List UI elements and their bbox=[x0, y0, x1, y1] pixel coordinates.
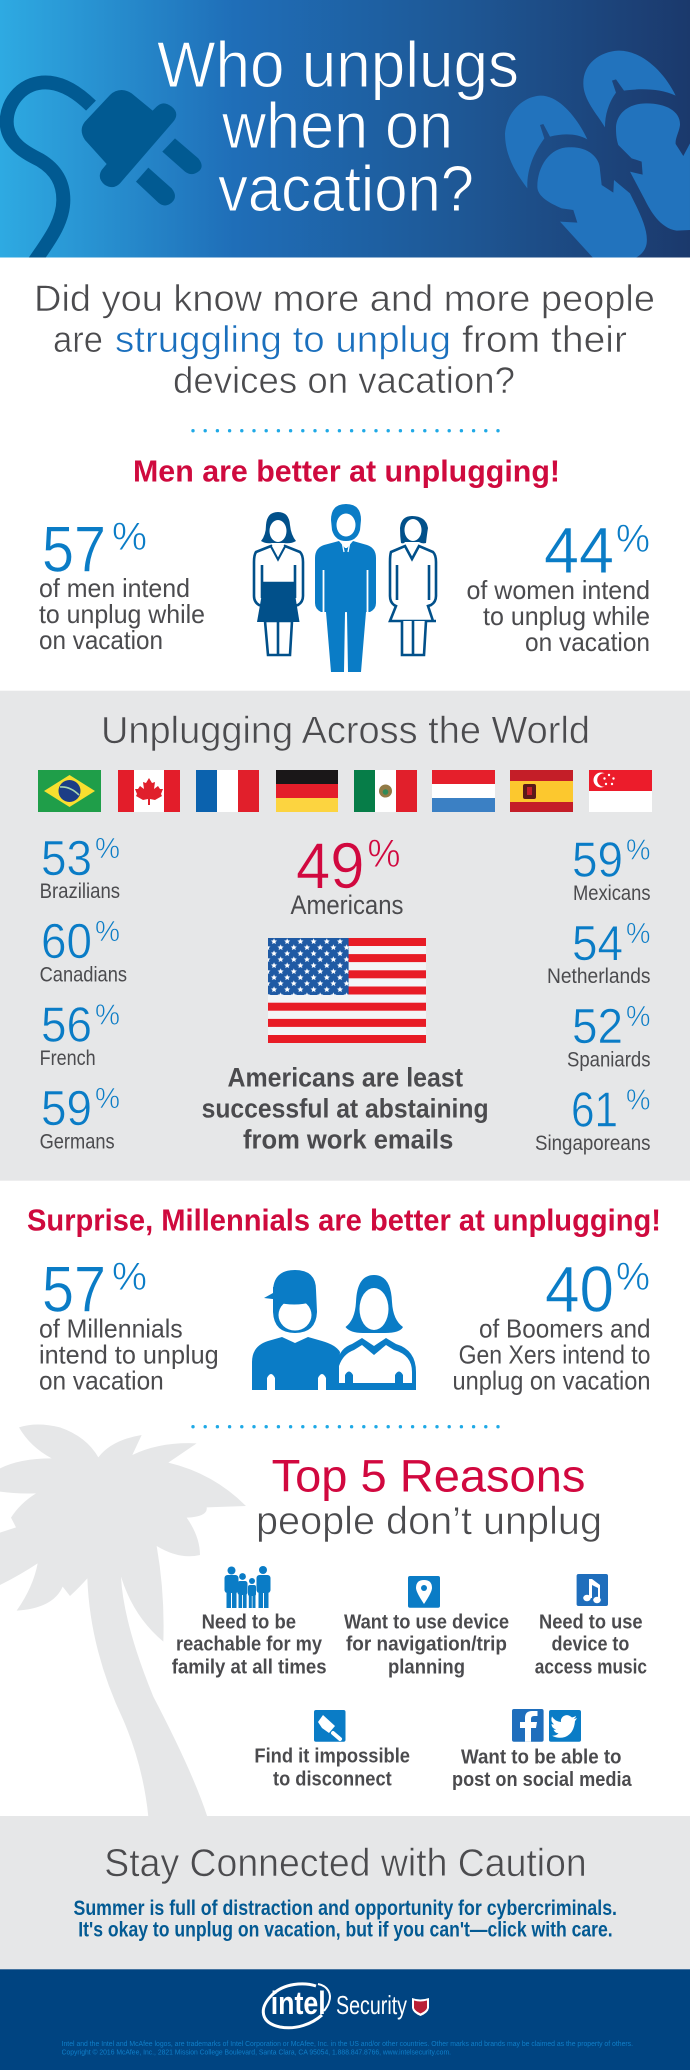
stat: 44 percent of women: % bbox=[616, 518, 650, 561]
text: impossible to disconnect: to disconnect bbox=[273, 1767, 392, 1790]
stat: Spaniards 52 percent: Spaniards bbox=[567, 1049, 650, 1072]
stat: Americans 49 percent: % bbox=[368, 833, 400, 876]
reason: impossible to disconnect bbox=[254, 1710, 410, 1790]
text block: Americans least successful: successful at abstaining bbox=[202, 1094, 489, 1124]
stat: Netherlands 54 percent: Netherlands bbox=[547, 965, 650, 988]
stat: Germans 59 percent: 59 bbox=[41, 1082, 92, 1136]
panel: header banner bbox=[0, 0, 690, 263]
stat: 40 percent of boomers and gen xers: % bbox=[616, 1256, 650, 1299]
stat: 57 percent of men: on vacation bbox=[39, 625, 163, 655]
text: reachable for family bbox=[172, 1610, 327, 1678]
text: social media bbox=[452, 1745, 632, 1791]
text: navigation: Want to use device bbox=[344, 1610, 509, 1633]
text block: Americans least successful: from work emails bbox=[243, 1124, 453, 1154]
stat: 44 percent of women: on vacation bbox=[525, 627, 650, 657]
stat: 57 percent of millennials: % bbox=[112, 1256, 147, 1299]
stat: French 56 percent: % bbox=[95, 1000, 120, 1032]
reason: social media bbox=[452, 1709, 632, 1791]
text: navigation bbox=[344, 1610, 509, 1678]
flag: Canada bbox=[118, 770, 180, 812]
stat: 44 percent of women: to unplug while bbox=[483, 601, 650, 631]
stat: 57 percent of men: to unplug while bbox=[39, 599, 205, 629]
stat: 44 percent of women bbox=[466, 514, 650, 657]
text block: intro question: devices on vacation? bbox=[173, 360, 515, 401]
flag: Netherlands bbox=[432, 770, 495, 812]
title: vacation? bbox=[218, 152, 474, 225]
stat: Canadians 60 percent: % bbox=[95, 916, 120, 948]
stat: Netherlands 54 percent: % bbox=[626, 918, 650, 950]
text block: legal copy: Copyright © 2016 McAfee, Inc., 2821 Mission College Boulevard, Santa Clara, CA 95054, 1.888.847.8766, www.intelsecurity.com. bbox=[62, 2048, 451, 2056]
flag: Mexico bbox=[354, 770, 417, 812]
text: reachable for family: family at all times bbox=[172, 1655, 327, 1678]
icon: twitter bbox=[549, 1710, 581, 1742]
stat: Singaporeans 61 percent: 61 bbox=[571, 1084, 618, 1138]
flag: Germany bbox=[276, 770, 338, 812]
reason: music bbox=[535, 1574, 647, 1678]
panel: men vs women bbox=[39, 454, 650, 672]
heading: across the world: Unplugging Across the World bbox=[101, 710, 590, 752]
stat: Singaporeans 61 percent: Singaporeans bbox=[535, 1132, 650, 1155]
panel: millennials vs boomers bbox=[27, 1203, 661, 1395]
title: when on bbox=[221, 89, 453, 162]
heading: stay connected: Stay Connected with Caution bbox=[104, 1842, 587, 1885]
stat: Germans 59 percent: Germans bbox=[40, 1130, 115, 1153]
text block: intro question: struggling to unplug bbox=[115, 319, 451, 360]
stat: French 56 percent: French bbox=[40, 1047, 96, 1070]
stat: French 56 percent: 56 bbox=[41, 999, 92, 1053]
stat: Spaniards 52 percent bbox=[567, 1000, 650, 1072]
title: Who unplugs bbox=[157, 28, 519, 101]
icon: music note bbox=[577, 1574, 608, 1606]
text: navigation: planning bbox=[388, 1655, 465, 1678]
icon: map pin bbox=[408, 1576, 440, 1608]
flag: Brazil bbox=[38, 770, 101, 812]
logo: Intel Security: intel bbox=[271, 1985, 326, 2021]
stat: 57 percent of men: of men intend bbox=[39, 573, 190, 603]
stat: Americans 49 percent: Americans bbox=[290, 890, 404, 920]
illustration: palm tree bbox=[0, 1424, 246, 1817]
panel: stay connected with caution bbox=[0, 1816, 690, 1970]
stat: 57 percent of men bbox=[39, 513, 205, 655]
text block: legal copy: Intel and the Intel and McAfee logos, are trademarks of Intel Corporation or McAfee, Inc. in the US and/or other countries. Other marks and brands may be claimed as the property of others. bbox=[62, 2041, 633, 2048]
stat: 40 percent of boomers and gen xers: unplug on vacation bbox=[452, 1365, 650, 1395]
reason: reachable for family bbox=[172, 1566, 327, 1678]
title bbox=[157, 28, 519, 225]
stat: Mexicans 59 percent: Mexicans bbox=[573, 882, 650, 905]
stat: 57 percent of men: 57 bbox=[42, 513, 106, 586]
panel: unplugging across the world bbox=[0, 691, 690, 1181]
stat: 57 percent of millennials: on vacation bbox=[39, 1365, 164, 1395]
flag: Singapore bbox=[589, 770, 652, 812]
stat: Mexicans 59 percent: 59 bbox=[572, 834, 623, 888]
stat: Netherlands 54 percent bbox=[547, 917, 650, 988]
icon: United States flag bbox=[268, 938, 426, 1043]
stat: Mexicans 59 percent: % bbox=[626, 835, 650, 867]
text block: intro question: from their bbox=[462, 319, 627, 360]
icon: family bbox=[224, 1566, 270, 1608]
text: reachable for family: reachable for my bbox=[176, 1633, 323, 1656]
stat: 57 percent of millennials: intend to unplug bbox=[39, 1339, 219, 1369]
text block: Americans least successful bbox=[202, 1063, 489, 1154]
stat: 57 percent of millennials: 57 bbox=[42, 1253, 106, 1326]
flag: Spain bbox=[510, 770, 573, 812]
stat: Brazilians 53 percent bbox=[40, 832, 120, 903]
stat: 57 percent of millennials bbox=[39, 1253, 219, 1395]
text: impossible to disconnect bbox=[254, 1745, 410, 1790]
stat: 57 percent of men: % bbox=[112, 516, 147, 559]
logo: Intel Security: Security bbox=[336, 1990, 407, 2020]
stat: 40 percent of boomers and gen xers: of Boomers and bbox=[479, 1313, 650, 1343]
stat: Canadians 60 percent bbox=[40, 915, 127, 987]
icon: woman, man, woman figures bbox=[254, 504, 436, 672]
icon: plug bbox=[314, 1710, 346, 1742]
stat: Brazilians 53 percent: % bbox=[95, 833, 120, 865]
text: reachable for family: Need to be bbox=[202, 1610, 296, 1633]
panel: top 5 reasons bbox=[172, 1451, 647, 1791]
stat: Germans 59 percent: % bbox=[95, 1083, 120, 1115]
text block: intro question bbox=[34, 278, 655, 401]
text: social media: Want to be able to bbox=[461, 1745, 622, 1768]
text: music: access music bbox=[535, 1655, 647, 1678]
stat: 40 percent of boomers and gen xers: 40 bbox=[545, 1253, 614, 1326]
heading: top 5 reasons bbox=[256, 1451, 602, 1543]
text block: Americans least successful: Americans are least bbox=[228, 1063, 463, 1093]
heading: millennials better: Surprise, Millennials are better at unplugging! bbox=[27, 1203, 661, 1238]
stat: Canadians 60 percent: 60 bbox=[41, 915, 92, 969]
logo: Intel Security bbox=[263, 1984, 429, 2028]
text: music: Need to use bbox=[539, 1610, 643, 1633]
panel: footer bbox=[0, 1969, 690, 2070]
icon: facebook bbox=[512, 1709, 544, 1742]
heading: top 5 reasons: people don’t unplug bbox=[256, 1500, 602, 1543]
stat: 44 percent of women: of women intend bbox=[466, 575, 650, 605]
stat: Netherlands 54 percent: 54 bbox=[572, 917, 623, 971]
stat: 40 percent of boomers and gen xers: Gen Xers intend to bbox=[459, 1339, 650, 1369]
text block: intro question: Did you know more and more people bbox=[34, 278, 655, 319]
text block: cybercriminals warning bbox=[74, 1897, 617, 1942]
stat: Brazilians 53 percent: 53 bbox=[41, 832, 92, 886]
stat: French 56 percent bbox=[40, 999, 120, 1070]
text: impossible to disconnect: Find it impossible bbox=[254, 1745, 410, 1768]
stat: 44 percent of women: 44 bbox=[544, 514, 614, 587]
text: music: device to bbox=[552, 1633, 629, 1656]
stat: Spaniards 52 percent: 52 bbox=[572, 1000, 623, 1054]
icon: flip-flops bbox=[505, 51, 690, 260]
stat: Americans 49 percent bbox=[290, 829, 404, 920]
text block: intro question: are bbox=[53, 319, 103, 360]
stat: 57 percent of millennials: of Millennials bbox=[39, 1313, 183, 1343]
heading: top 5 reasons: Top 5 Reasons bbox=[272, 1451, 585, 1502]
text: social media: post on social media bbox=[452, 1768, 632, 1791]
heading: men are better: Men are better at unplugging! bbox=[133, 454, 560, 489]
stat: Canadians 60 percent: Canadians bbox=[40, 964, 127, 987]
text block: legal copy bbox=[62, 2041, 633, 2056]
stat: Americans 49 percent: 49 bbox=[296, 829, 364, 902]
reason: navigation bbox=[344, 1576, 509, 1678]
text: navigation: for navigation/trip bbox=[346, 1633, 507, 1656]
stat: Brazilians 53 percent: Brazilians bbox=[40, 880, 120, 903]
icon: unplugged plug and cord bbox=[7, 82, 202, 263]
stat: Spaniards 52 percent: % bbox=[626, 1001, 650, 1033]
stat: Singaporeans 61 percent: % bbox=[626, 1085, 650, 1117]
icon: young man and woman bbox=[252, 1270, 416, 1390]
stat: 40 percent of boomers and gen xers bbox=[452, 1253, 650, 1395]
stat: Singaporeans 61 percent bbox=[535, 1084, 650, 1155]
stat: Mexicans 59 percent bbox=[572, 834, 650, 905]
text: music bbox=[535, 1610, 647, 1678]
stat: Germans 59 percent bbox=[40, 1082, 120, 1153]
flag: France bbox=[196, 770, 259, 812]
